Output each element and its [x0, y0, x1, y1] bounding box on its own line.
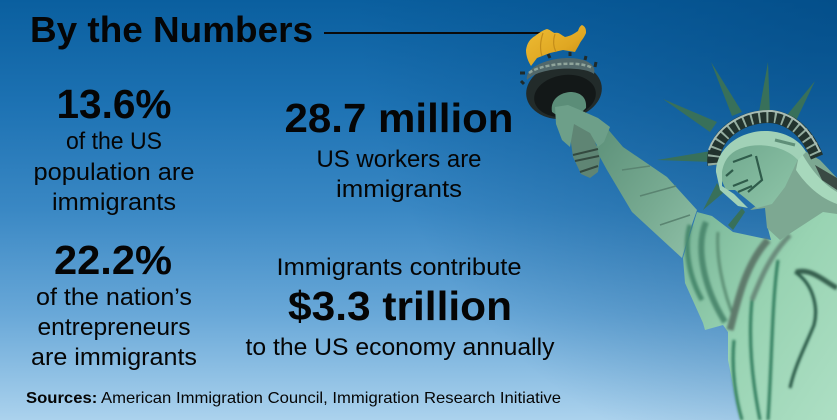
stat: $3.3 trillion contribution: Immigrants contribute	[276, 254, 522, 281]
torch handle	[568, 122, 600, 178]
crown	[714, 117, 817, 165]
stat: 22.2% of entrepreneurs: are immigrants	[31, 344, 197, 371]
hair and neck	[750, 148, 837, 240]
stat: 28.7 million workers: immigrants	[336, 176, 462, 203]
stat: $3.3 trillion contribution: to the US economy annually	[246, 334, 554, 361]
title rule	[324, 32, 543, 34]
illustration: Statue of Liberty	[520, 25, 837, 420]
stat: 22.2% of entrepreneurs	[31, 237, 197, 371]
sources: Sources: American Immigration Council, Immigration Research Initiative	[26, 390, 561, 407]
crown rays	[657, 62, 815, 230]
stat: 22.2% of entrepreneurs: of the nation’s	[36, 284, 192, 311]
title: By the Numbers	[30, 9, 313, 50]
stat: 28.7 million workers: US workers are	[316, 146, 482, 173]
stat: $3.3 trillion contribution	[246, 254, 554, 361]
stat: 22.2% of entrepreneurs: 22.2%	[54, 237, 172, 283]
stat: 13.6% of the US population: of the US	[66, 128, 162, 155]
raised arm	[596, 120, 697, 258]
hand	[555, 105, 610, 147]
torch platform	[520, 52, 606, 124]
robe	[683, 190, 837, 420]
flame	[526, 25, 586, 66]
stat: 13.6% of the US population: immigrants	[52, 189, 176, 216]
stat: 13.6% of the US population	[34, 81, 194, 216]
stat: 28.7 million workers: 28.7 million	[284, 95, 514, 141]
stat: $3.3 trillion contribution: $3.3 trillion	[288, 283, 512, 329]
stat: 22.2% of entrepreneurs: entrepreneurs	[38, 314, 190, 341]
hair fringe	[716, 131, 806, 208]
stat: 28.7 million workers	[284, 95, 514, 203]
stat: 13.6% of the US population: 13.6%	[56, 81, 172, 127]
stat: 13.6% of the US population: population are	[34, 159, 194, 186]
face	[718, 136, 800, 208]
robe folds	[687, 222, 837, 420]
